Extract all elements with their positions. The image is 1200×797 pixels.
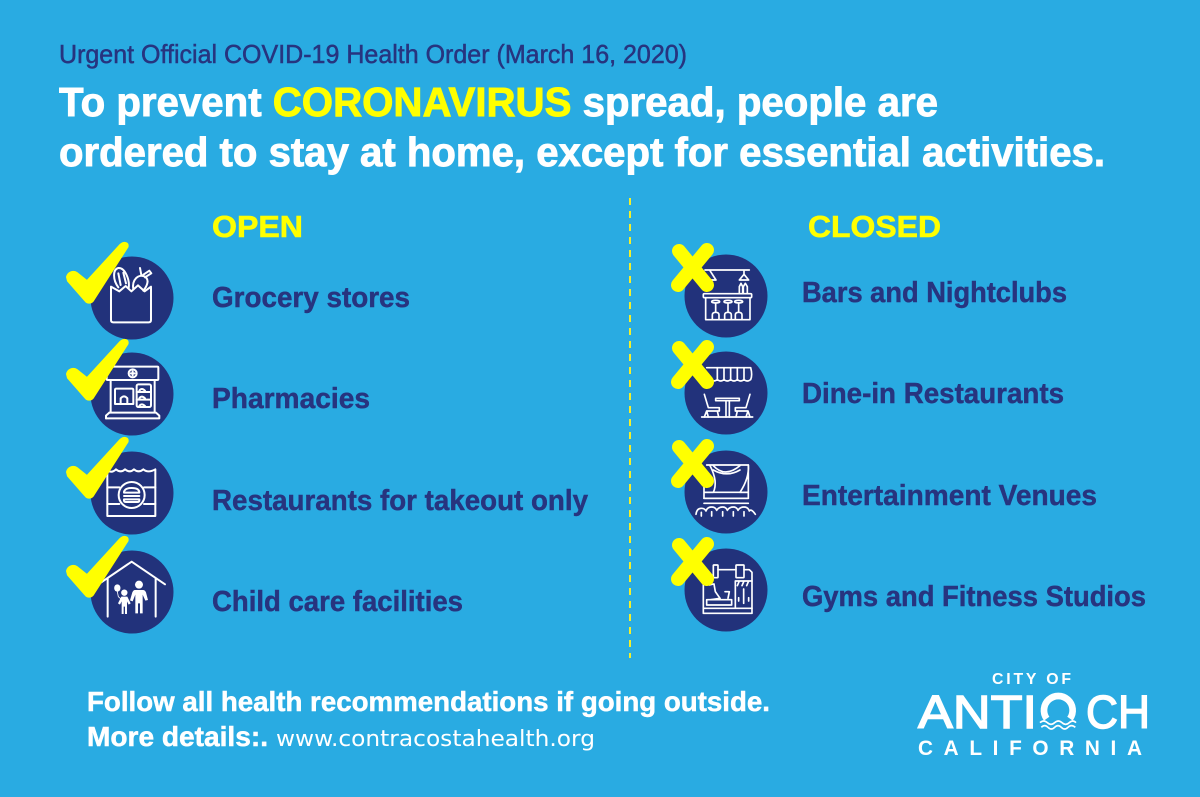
label: child care: Child care facilities [212,586,463,618]
label: dine-in: Dine-in Restaurants [802,378,1064,410]
headline: To prevent CORONAVIRUS spread, people are [59,79,938,125]
logo: City of Antioch: ANTI [918,686,1037,738]
headline: ordered to stay at home, except for essential activities. [59,129,1105,175]
logo: City of Antioch [918,671,1150,760]
label: entertainment: Entertainment Venues [802,480,1097,512]
heading: closed: CLOSED [808,209,941,244]
icon: bar with cross [678,250,768,338]
logo: City of Antioch: CH [1086,686,1150,738]
logo: City of Antioch: CALIFORNIA [918,737,1142,760]
headline [59,79,1105,175]
footer: website: www.contracostahealth.org [276,726,595,752]
icon: child care house with check [66,536,174,634]
icon: gym with cross [678,544,768,632]
label: grocery stores: Grocery stores [212,282,410,314]
icon: entertainment stage with cross [678,446,768,534]
heading: open: OPEN [212,209,303,244]
dashed column divider [629,198,631,658]
subtitle: health order: Urgent Official COVID-19 Health Order (March 16, 2020) [59,41,687,69]
icon: dine-in restaurant with cross [678,347,768,434]
label: gyms: Gyms and Fitness Studios [802,581,1146,613]
label: bars: Bars and Nightclubs [802,277,1067,309]
label: pharmacies: Pharmacies [212,383,370,415]
footer: more details: More details:. [87,721,268,752]
footer: recommendation: Follow all health recommendations if going outside. [87,686,770,717]
label: restaurants for takeout: Restaurants for takeout only [212,485,588,517]
icon: takeout bag with check [66,437,174,534]
icon: pharmacy with check [66,339,174,436]
icon: grocery bag with check [66,242,174,340]
logo: City of Antioch: CITY OF [992,671,1071,688]
